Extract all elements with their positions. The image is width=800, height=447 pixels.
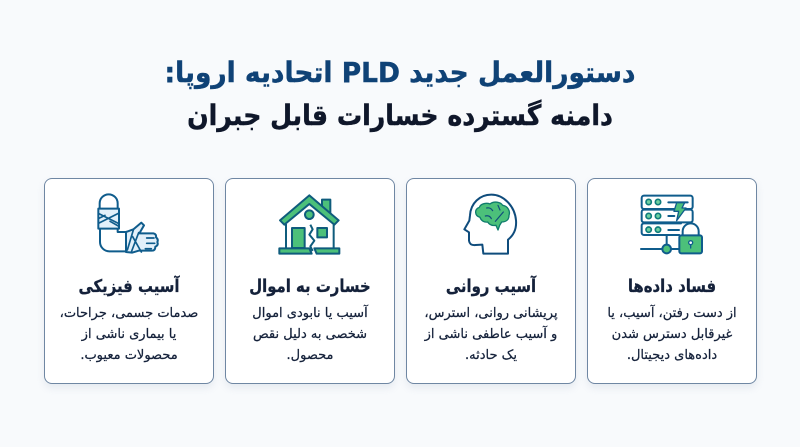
title xyxy=(165,56,635,132)
description xyxy=(60,306,198,362)
heading: آسیب فیزیکی xyxy=(78,277,180,297)
panel: property damage xyxy=(225,178,395,384)
description: محصولات معیوب. xyxy=(80,348,178,362)
panel: psychological harm xyxy=(406,178,576,384)
description: داده‌های دیجیتال. xyxy=(627,348,717,362)
description xyxy=(424,306,558,362)
description: صدمات جسمی، جراحات، xyxy=(60,306,198,320)
icon: bandaged arm xyxy=(97,193,159,254)
description: شخصی به دلیل نقص xyxy=(253,326,367,342)
description: محصول. xyxy=(287,348,333,362)
description xyxy=(607,304,737,362)
description: غیرقابل دسترس شدن xyxy=(612,326,732,342)
heading: آسیب روانی xyxy=(446,277,536,297)
icon: server with lock xyxy=(640,194,703,254)
description: آسیب یا نابودی اموال xyxy=(252,306,368,320)
title line 2: دامنه گسترده خسارات قابل جبران xyxy=(187,99,613,132)
description: از دست رفتن، آسیب، یا xyxy=(607,306,737,320)
description: یا بیماری ناشی از xyxy=(82,326,176,342)
description: یک حادثه. xyxy=(465,348,517,362)
heading: فساد داده‌ها xyxy=(628,277,716,297)
title line 1: دستورالعمل جدید PLD اتحادیه اروپا: xyxy=(165,56,635,89)
panel: data corruption xyxy=(587,178,757,384)
description: پریشانی روانی، استرس، xyxy=(424,306,558,320)
icon: cracked house xyxy=(278,194,340,255)
icon: head with brain xyxy=(463,194,518,255)
description: و آسیب عاطفی ناشی از xyxy=(425,326,557,342)
heading: خسارت به اموال xyxy=(249,277,371,297)
description xyxy=(252,304,368,362)
panel: physical injury xyxy=(44,178,214,384)
